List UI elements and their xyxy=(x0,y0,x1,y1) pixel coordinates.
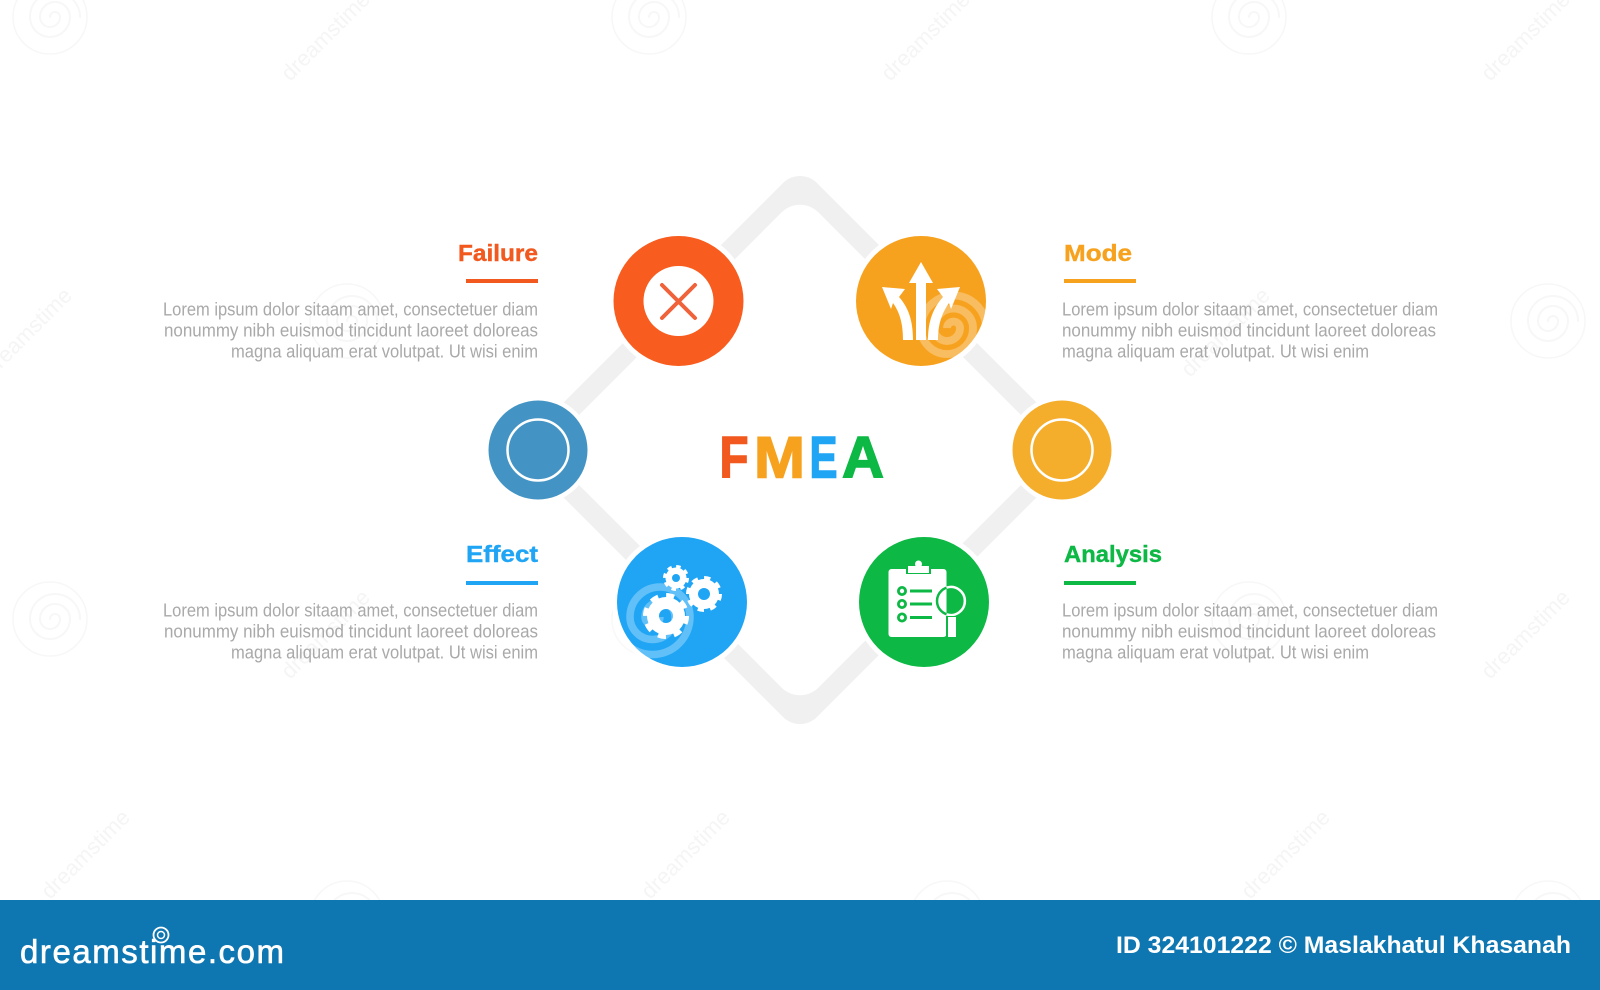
text block: Analysis description xyxy=(1062,600,1438,662)
text block: Mode description: magna aliquam erat volutpat. Ut wisi enim xyxy=(1062,342,1369,362)
panel: Failure xyxy=(163,240,538,362)
watermark layer on white background: dreamstime xyxy=(636,805,735,904)
panel: Effect xyxy=(163,541,538,662)
text block: Effect description: magna aliquam erat volutpat. Ut wisi enim xyxy=(231,642,538,662)
panel: Analysis xyxy=(1062,541,1438,662)
text block: Effect description: Lorem ipsum dolor sitaam amet, consectetuer diam xyxy=(163,600,538,620)
centre title FMEA: E xyxy=(810,426,838,490)
watermark layer on white background: dreamstime xyxy=(276,585,375,684)
centre title FMEA xyxy=(720,426,884,490)
text block: Mode description xyxy=(1062,300,1438,362)
text block: Mode description: nonummy nibh euismod tincidunt laoreet doloreas xyxy=(1062,320,1436,340)
text block: Failure description: nonummy nibh euismod tincidunt laoreet doloreas xyxy=(164,320,538,340)
text block: Failure description: Lorem ipsum dolor sitaam amet, consectetuer diam xyxy=(163,300,538,320)
text block: Analysis description: Lorem ipsum dolor sitaam amet, consectetuer diam xyxy=(1062,600,1438,620)
text block: Failure description: magna aliquam erat volutpat. Ut wisi enim xyxy=(231,342,538,362)
panel: Mode xyxy=(1062,240,1438,362)
heading: Analysis: Analysis xyxy=(1064,541,1162,567)
heading: Mode: Mode xyxy=(1064,240,1132,266)
centre title FMEA: A xyxy=(842,426,884,490)
text block: Analysis description: magna aliquam erat volutpat. Ut wisi enim xyxy=(1062,642,1369,662)
watermark layer on white background: dreamstime xyxy=(1176,283,1275,382)
centre title FMEA: F xyxy=(720,426,748,490)
swirl watermarks over circles xyxy=(615,296,986,654)
text block: Effect description: nonummy nibh euismod tincidunt laoreet doloreas xyxy=(164,622,538,642)
right connector circle xyxy=(1008,396,1116,504)
heading: Effect: Effect xyxy=(466,541,538,567)
icon: effect gears circle xyxy=(612,532,752,672)
heading: Failure: Failure xyxy=(458,240,538,266)
text block: Mode description: Lorem ipsum dolor sitaam amet, consectetuer diam xyxy=(1062,300,1438,320)
icon: mode diverging arrows circle xyxy=(851,231,991,371)
icon: failure cross circle xyxy=(608,231,748,371)
watermark layer on white background: dreamstime xyxy=(1476,585,1575,684)
text block: Analysis description: nonummy nibh euismod tincidunt laoreet doloreas xyxy=(1062,622,1436,642)
footer credit: ID 324101222 © Maslakhatul Khasanah xyxy=(1116,932,1571,959)
footer bar xyxy=(0,900,1600,990)
text block: Effect description xyxy=(163,600,538,662)
left connector circle xyxy=(484,396,592,504)
diamond frame xyxy=(516,166,1084,734)
centre title FMEA: M xyxy=(754,426,805,490)
icon: analysis clipboard circle xyxy=(854,532,994,672)
footer logo: dreamstime.com xyxy=(20,933,284,970)
watermark layer on white background: dreamstime xyxy=(1236,805,1335,904)
text block: Failure description xyxy=(163,300,538,362)
watermark layer on white background: dreamstime xyxy=(36,805,135,904)
